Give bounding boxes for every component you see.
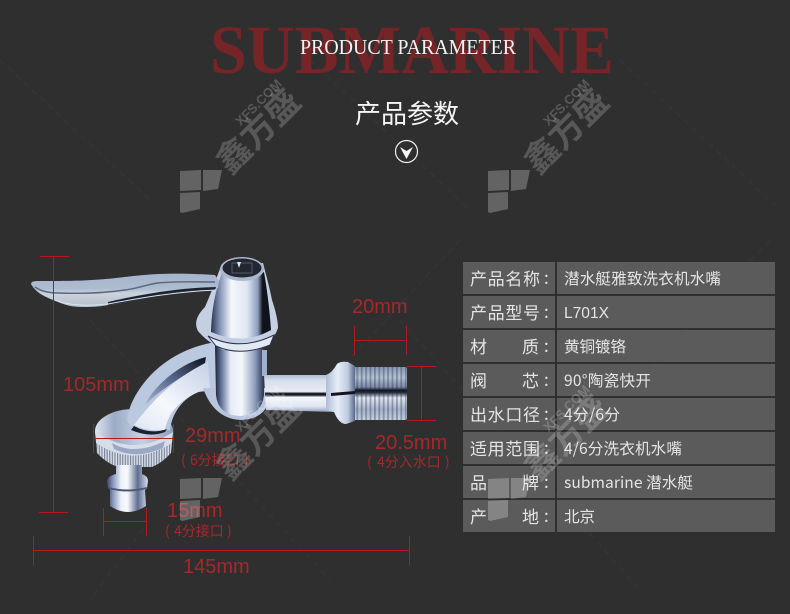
dimension: 29mm connector: ( bbox=[181, 450, 186, 470]
faucet nipple groove bbox=[108, 487, 147, 492]
faucet lever handle bbox=[31, 274, 219, 307]
dimension: 29mm connector bbox=[94, 424, 249, 470]
dimension: 20.5mm inlet: 20.5mm bbox=[375, 432, 447, 454]
row: model: : bbox=[544, 298, 549, 323]
faucet nut inner ring bbox=[112, 441, 165, 454]
watermark: over faucet bottom: 鑫方盛 bbox=[203, 382, 310, 489]
dimension: 105mm height bbox=[39, 256, 130, 512]
row: product name: 潜水艇雅致洗衣机水嘴 bbox=[564, 267, 721, 289]
dimension: 20.5mm inlet: 4分入水口 bbox=[377, 452, 441, 472]
faucet base flare bbox=[203, 388, 268, 420]
faucet lower column bbox=[215, 346, 264, 416]
watermark: top right: XFS.COM bbox=[540, 76, 593, 129]
row: valve core bbox=[463, 364, 775, 396]
dimension: 105mm height: 105mm bbox=[63, 374, 130, 396]
watermark: over table bbox=[488, 382, 618, 521]
faucet thread bbox=[353, 367, 407, 420]
faucet column side strip bbox=[262, 350, 267, 376]
row: brand: submarine 潜水艇 bbox=[564, 471, 693, 493]
row: origin bbox=[463, 500, 775, 532]
row: valve core: 90°陶瓷快开 bbox=[564, 369, 651, 391]
row: product name bbox=[463, 262, 775, 294]
row: valve core: 芯 bbox=[522, 367, 539, 392]
dimension: 20.5mm inlet: ( bbox=[367, 452, 372, 472]
faucet cap bbox=[220, 257, 264, 281]
faucet coupling nut dome bbox=[95, 409, 173, 453]
dimension: 15mm connector bbox=[104, 500, 232, 541]
watermark: top left: XFS.COM bbox=[232, 76, 285, 129]
row: model: 产品型号 bbox=[470, 299, 540, 324]
faucet spout highlight bbox=[134, 362, 210, 430]
watermark: over table: XFS.COM bbox=[540, 382, 593, 435]
row: origin: : bbox=[544, 502, 549, 527]
parameter table bbox=[463, 262, 775, 532]
row: application: 适用范围 bbox=[470, 435, 540, 460]
watermark: over faucet bottom bbox=[180, 382, 310, 521]
row: material: 材 bbox=[470, 333, 487, 358]
heading: product parameter: PRODUCT PARAMETER bbox=[300, 35, 516, 59]
row: application: 4/6分洗衣机水嘴 bbox=[564, 437, 682, 459]
row: brand: 牌 bbox=[522, 469, 539, 494]
faucet skirt ring bbox=[208, 335, 274, 351]
watermark: top right: 鑫方盛 bbox=[511, 76, 618, 183]
row: outlet diameter: 4分/6分 bbox=[564, 403, 620, 425]
dimension: 20.5mm inlet bbox=[367, 366, 450, 472]
dimension: 29mm connector: ) bbox=[244, 450, 249, 470]
faucet lever under shadow bbox=[108, 287, 216, 305]
dimension: 145mm width bbox=[33, 536, 410, 578]
dimension: 15mm connector: 15mm bbox=[167, 500, 223, 522]
row: origin: 产 bbox=[470, 503, 487, 528]
row: outlet diameter: : bbox=[544, 400, 549, 425]
faucet dome bullet bbox=[211, 272, 271, 339]
row: brand: 品 bbox=[470, 469, 487, 494]
row: material: 质 bbox=[522, 333, 539, 358]
row: origin: 北京 bbox=[564, 505, 595, 527]
faucet illustration bbox=[31, 257, 407, 512]
watermark: over table: 鑫方盛 bbox=[511, 382, 618, 489]
row: product name: 产品名称 bbox=[470, 265, 540, 290]
dimension: 20.5mm inlet: ) bbox=[445, 452, 450, 472]
faucet lever bottom rim bbox=[55, 290, 216, 305]
row: application bbox=[463, 432, 775, 464]
dimension: 20mm thread length: 20mm bbox=[352, 296, 408, 318]
dimension: 15mm connector: 4分接口 bbox=[174, 521, 224, 541]
row: material: 黄铜镀铬 bbox=[564, 335, 626, 357]
faucet outlet arm bbox=[264, 375, 336, 412]
row: product name: : bbox=[544, 264, 549, 289]
heading: Chinese title: 产品参数 bbox=[355, 94, 459, 131]
row: valve core: : bbox=[544, 366, 549, 391]
faucet flange shadow bbox=[331, 391, 355, 396]
row: material: : bbox=[544, 332, 549, 357]
faucet flange bbox=[326, 362, 355, 424]
row: material bbox=[463, 330, 775, 362]
background brand word: SUBMARINE bbox=[210, 12, 614, 88]
dimension: 29mm connector: 29mm bbox=[185, 425, 241, 447]
dimension: 15mm connector: ) bbox=[227, 521, 232, 541]
faucet spout dark stripe bbox=[145, 357, 206, 405]
icon: down arrow in circle bbox=[396, 140, 418, 162]
faucet lever groove bbox=[35, 282, 215, 293]
row: model: L701X bbox=[564, 305, 610, 322]
watermark: top right bbox=[488, 76, 618, 213]
watermark: top left: 鑫方盛 bbox=[203, 76, 310, 183]
faucet knurled nut bbox=[95, 432, 173, 467]
dimension: 145mm width: 145mm bbox=[183, 556, 250, 578]
row: valve core: 阀 bbox=[470, 367, 487, 392]
watermark: top left bbox=[180, 76, 310, 213]
faucet spout tip shadow bbox=[131, 426, 167, 435]
dimension: 29mm connector: 6分接口 bbox=[190, 450, 240, 470]
row: application: : bbox=[544, 434, 549, 459]
faucet spout silhouette bbox=[127, 342, 218, 432]
row: outlet diameter: 出水口径 bbox=[470, 401, 540, 426]
row: brand bbox=[463, 466, 775, 498]
row: outlet diameter bbox=[463, 398, 775, 430]
row: model bbox=[463, 296, 775, 328]
faucet hose nipple bbox=[107, 465, 148, 512]
row: origin: 地 bbox=[522, 503, 539, 528]
watermark: over faucet bottom: XFS.COM bbox=[232, 382, 285, 435]
dimension: 20mm thread length bbox=[352, 296, 408, 355]
dimension: 15mm connector: ( bbox=[165, 521, 170, 541]
faucet dome silhouette bbox=[196, 263, 278, 350]
row: brand: : bbox=[544, 468, 549, 493]
